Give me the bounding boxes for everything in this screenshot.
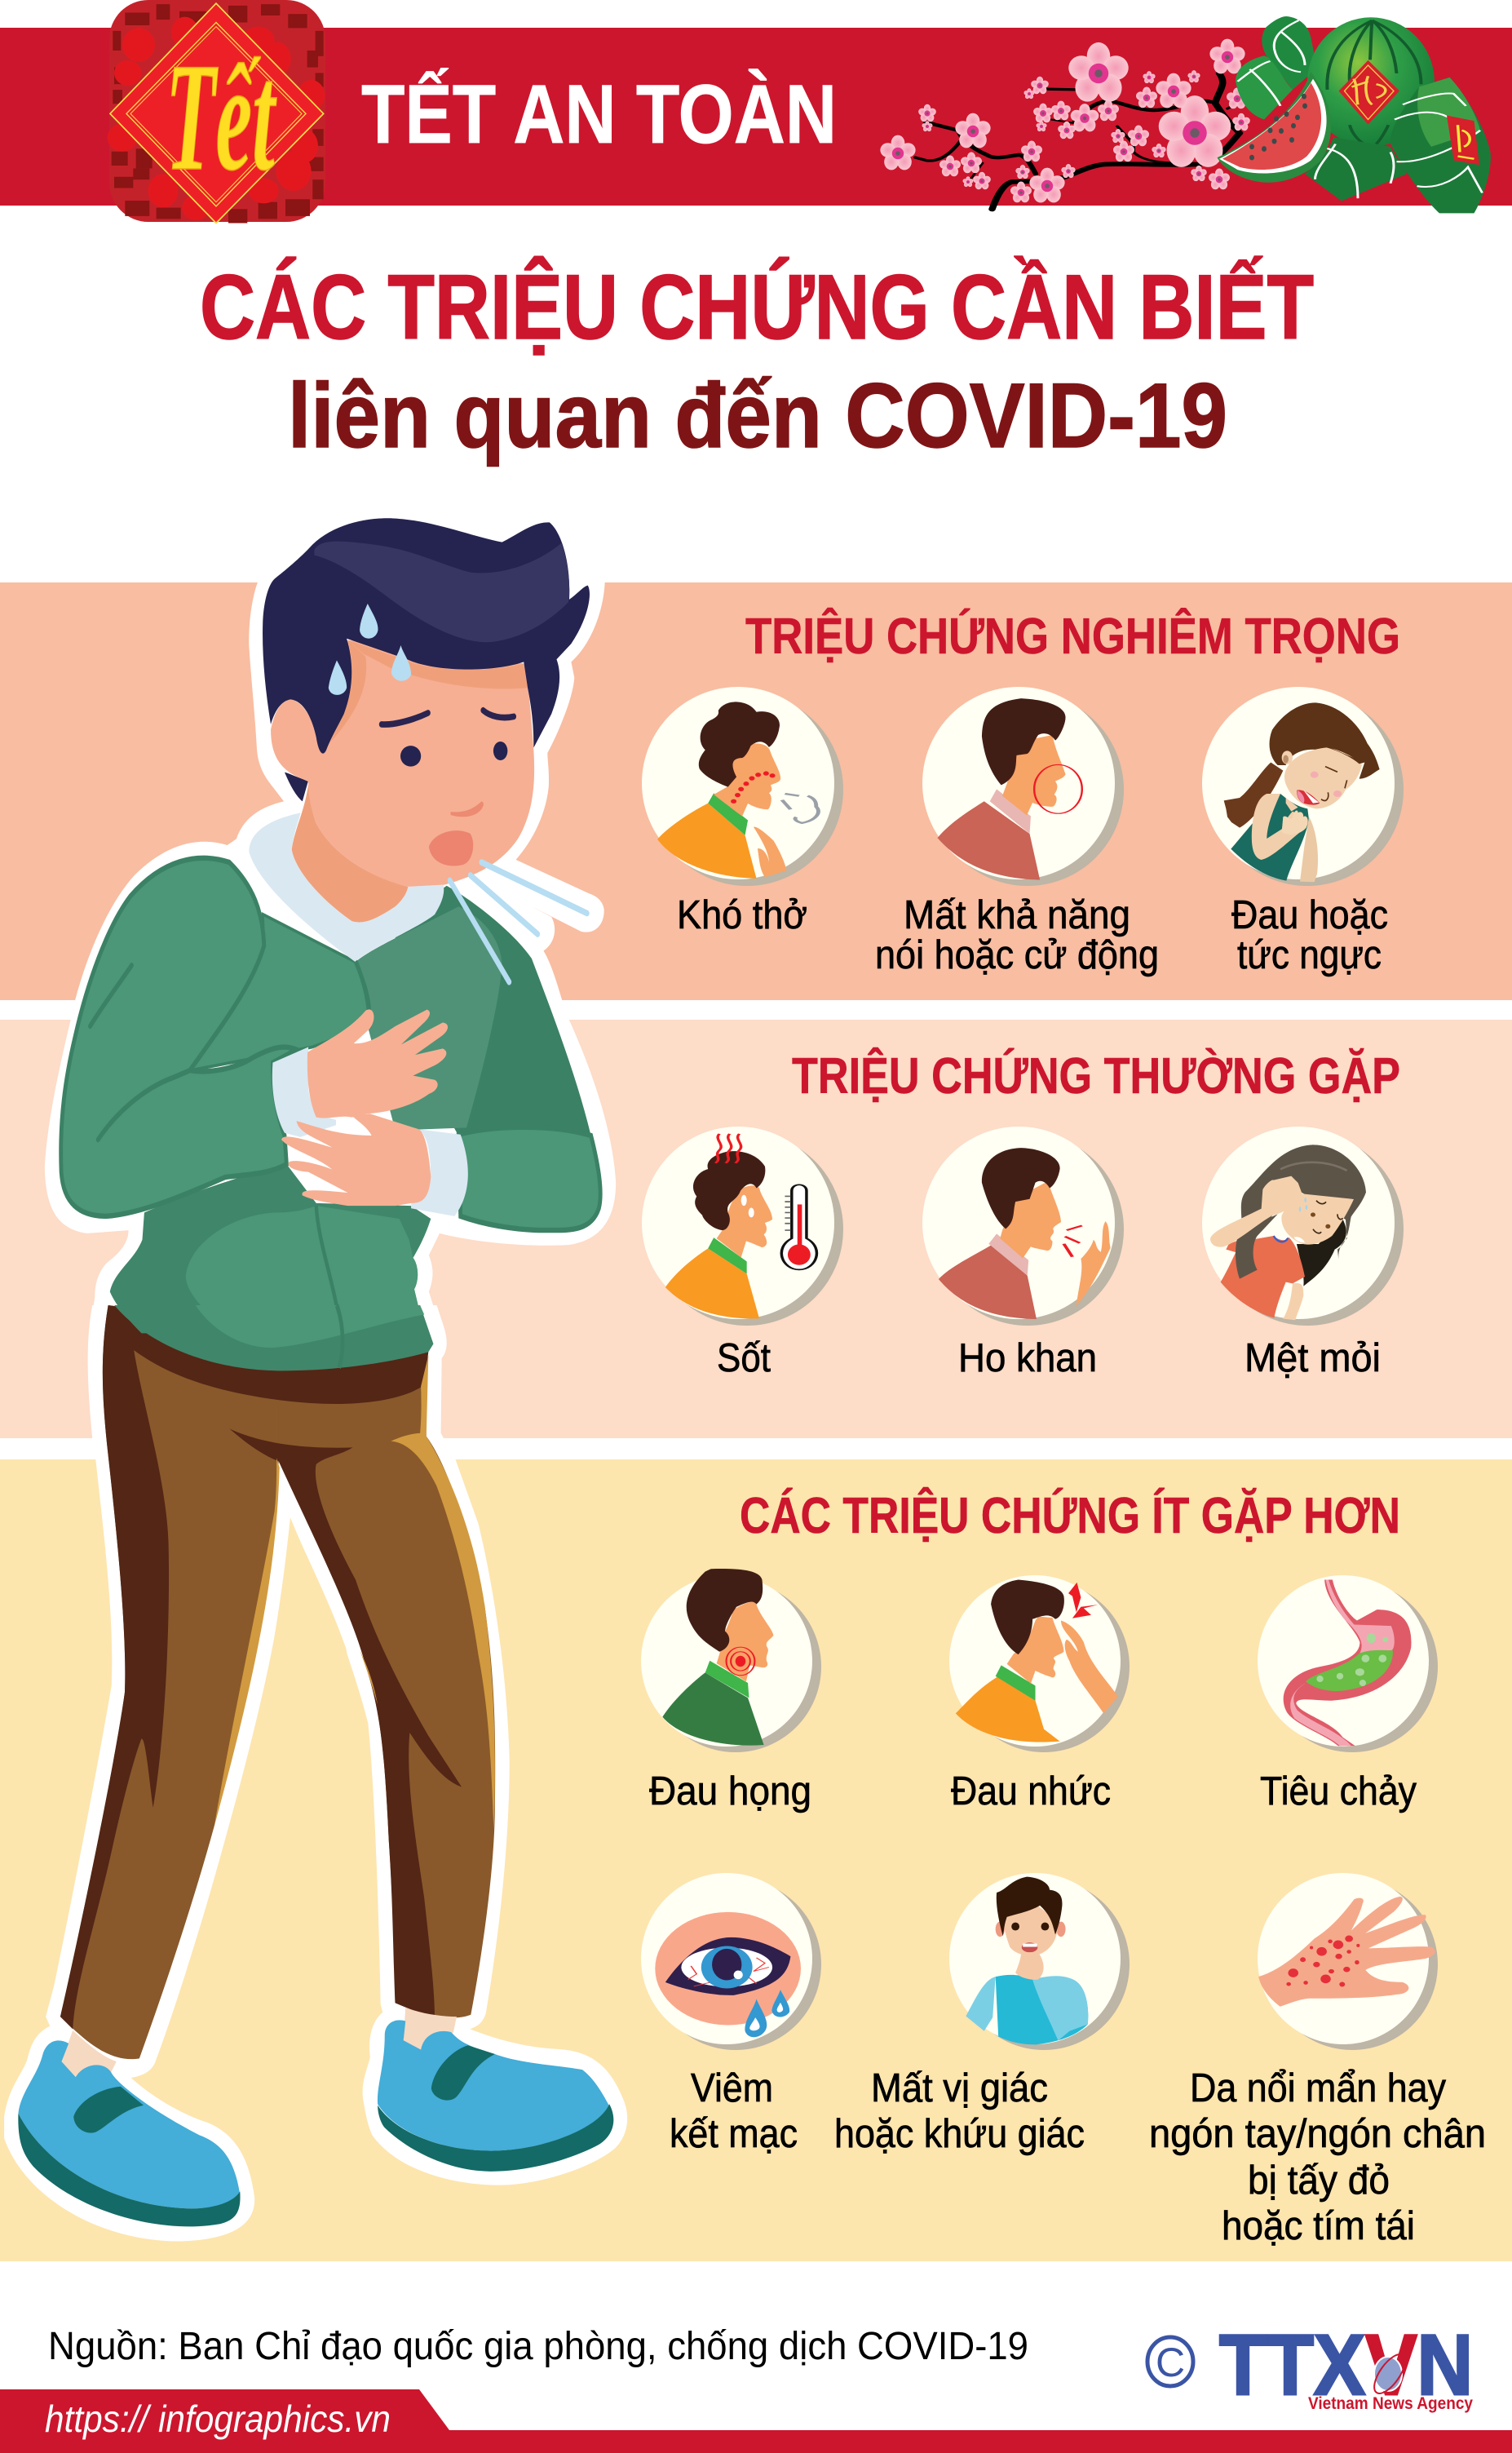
label: Mệt mỏi (1245, 1336, 1381, 1380)
label: Đau nhức (951, 1769, 1111, 1813)
symptom: aches (949, 1575, 1130, 1813)
badge: Tết emblem: Tết (166, 32, 277, 203)
label: Đau hoặc (1231, 893, 1388, 937)
icon: man with circled mouth (937, 698, 1082, 880)
man: head (249, 518, 590, 962)
heading: common symptoms: TRIỆU CHỨNG THƯỜNG GẶP (792, 1048, 1400, 1105)
panel: less common symptoms (0, 1459, 1512, 2261)
icon: boy touching chin (966, 1877, 1088, 2044)
title (200, 256, 1314, 467)
label: Ho khan (958, 1336, 1097, 1380)
symptom: rash or discoloured fingers and toes (1149, 1873, 1486, 2248)
panel: severe symptoms (0, 582, 1512, 1000)
man: sweat drops (329, 604, 411, 695)
label: hoặc tím tái (1222, 2204, 1415, 2248)
label (834, 2066, 1085, 2156)
label: kết mạc (670, 2112, 798, 2156)
icon: red eye with tears (655, 1912, 801, 2037)
banner title: TẾT AN TOÀN (361, 68, 837, 161)
symptom: dry cough (922, 1127, 1124, 1380)
man: sweater (61, 858, 600, 1333)
icon: tired woman (1210, 1145, 1366, 1320)
footer (0, 2318, 1512, 2453)
icon: man breathing hard (657, 702, 818, 879)
icon: man coughing (939, 1148, 1111, 1319)
icon: hand with rash (1258, 1897, 1435, 2007)
label: Sốt (717, 1336, 771, 1380)
label (1231, 893, 1388, 977)
symptom: conjunctivitis (641, 1873, 821, 2156)
symptom: loss of speech or movement (875, 687, 1159, 977)
title line 1: CÁC TRIỆU CHỨNG CẦN BIẾT (200, 256, 1314, 358)
copyright mark: C (1156, 2340, 1185, 2385)
label: tức ngực (1237, 933, 1382, 977)
symptom: shortness of breath (642, 687, 843, 937)
symptom: diarrhoea (1258, 1575, 1438, 1813)
copyright mark (1147, 2337, 1193, 2386)
symptom: loss of taste or smell (834, 1873, 1130, 2156)
source: Nguồn: Ban Chỉ đạo quốc gia phòng, chống dịch COVID-19 (48, 2325, 1028, 2368)
label: bị tấy đỏ (1248, 2159, 1390, 2203)
label (875, 893, 1159, 977)
illustration: sick man holding chest (4, 518, 627, 2241)
symptom: fatigue (1202, 1127, 1404, 1380)
icon: woman holding chest (1224, 702, 1380, 882)
label: ngón tay/ngón chân (1149, 2112, 1486, 2156)
man: cuffs and hands (272, 1009, 468, 1216)
icon: man with fever and thermometer (665, 1134, 816, 1318)
icon: man with headache (956, 1580, 1118, 1742)
illustration: Tết food, watermelon and rice cakes (1217, 16, 1491, 213)
icon: stomach (1284, 1580, 1412, 1746)
label (670, 2066, 798, 2156)
label: Viêm (691, 2066, 773, 2110)
bottom band and tab (0, 2389, 1512, 2453)
label: hoặc khứu giác (834, 2112, 1085, 2156)
title line 2: liên quan đến COVID-19 (288, 365, 1227, 467)
symptom: chest pain (1202, 687, 1404, 977)
label: Da nổi mẩn hay (1190, 2066, 1446, 2110)
label: nói hoặc cử động (875, 933, 1159, 977)
label: Khó thở (677, 893, 807, 937)
man: upper white outline (45, 558, 616, 1333)
logo: TTXVN: Vietnam News Agency (1308, 2394, 1473, 2413)
label: Mất vị giác (871, 2066, 1048, 2110)
panel: common symptoms (0, 1020, 1512, 1438)
badge: Tết emblem (108, 0, 325, 223)
illustration: blossom branch (880, 39, 1250, 209)
heading: severe symptoms: TRIỆU CHỨNG NGHIÊM TRỌNG (745, 609, 1400, 665)
symptom: sore throat (641, 1569, 821, 1813)
man: upper body (61, 518, 600, 1333)
man: breath lines (450, 862, 587, 982)
website url: https:// infographics.vn (45, 2398, 391, 2440)
label: Đau họng (649, 1769, 811, 1813)
label (1149, 2066, 1486, 2248)
label: Tiêu chảy (1260, 1769, 1417, 1813)
header banner (0, 0, 1512, 223)
man: sweater hem (114, 1305, 433, 1370)
heading: less common symptoms: CÁC TRIỆU CHỨNG ÍT GẶP HƠN (740, 1488, 1400, 1544)
symptom: fever (642, 1127, 843, 1380)
icon: man with sore throat (662, 1569, 773, 1746)
label: Mất khả năng (904, 893, 1130, 937)
logo: TTXVN: TTXVN (1219, 2318, 1473, 2413)
man: legs and shoes (4, 1305, 627, 2242)
